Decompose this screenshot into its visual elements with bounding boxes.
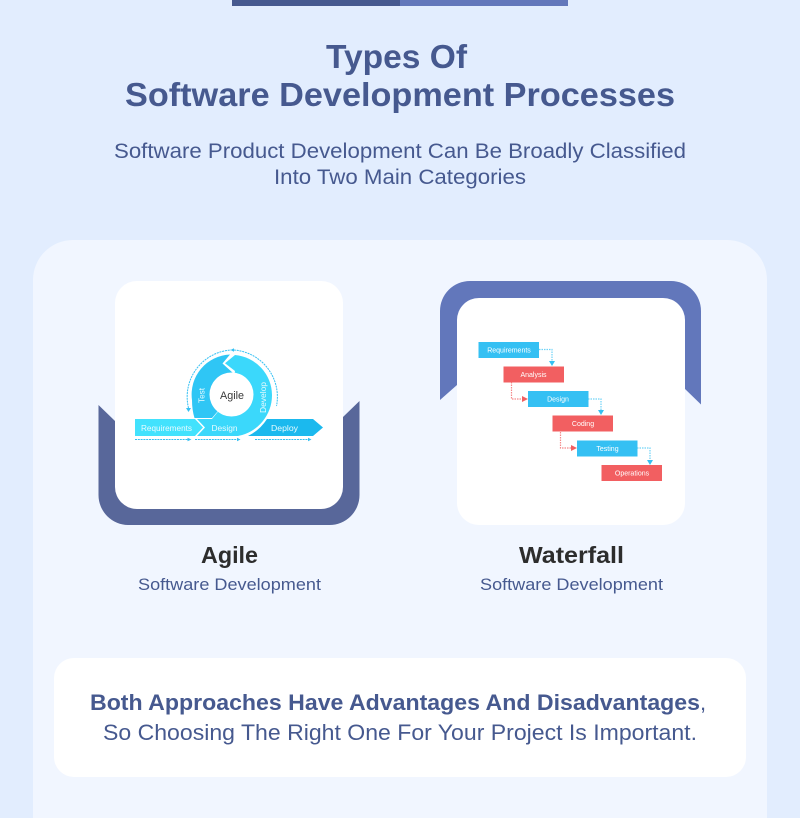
test label: Test — [196, 387, 206, 403]
callout — [54, 658, 746, 777]
callout text: So Choosing The Right One For Your Project Is Important. — [103, 720, 697, 745]
step: requirements — [478, 342, 539, 358]
callout text — [90, 690, 706, 745]
step: coding: Coding — [572, 421, 594, 428]
connector arrowheads — [522, 361, 653, 465]
title: Types Of — [326, 38, 468, 75]
callout text: Both Approaches Have Advantages And Disadvantages — [90, 690, 700, 715]
step: operations — [602, 465, 662, 481]
agile label: Agile — [220, 390, 244, 402]
agile centre circle — [210, 372, 254, 416]
waterfall white card — [457, 298, 685, 525]
deploy arrow — [248, 419, 323, 436]
requirements chevron — [135, 419, 203, 436]
develop label: Develop — [258, 382, 268, 413]
agile heading: Agile — [201, 542, 258, 568]
step: coding — [552, 416, 613, 432]
subtitle: Software Product Development Can Be Broadly Classified — [114, 140, 686, 163]
top accent bar — [232, 0, 568, 6]
develop and design band — [197, 355, 272, 436]
step: analysis: Analysis — [520, 372, 547, 379]
panel: agile — [98, 281, 360, 594]
step: design: Design — [547, 396, 569, 404]
waterfall heading: Waterfall — [519, 542, 624, 568]
dashed flow arrows — [135, 350, 308, 440]
design label: Design — [212, 423, 238, 433]
agile frame — [98, 401, 360, 525]
test arc — [192, 354, 233, 418]
panel: main content — [33, 240, 767, 818]
callout card — [54, 658, 746, 777]
waterfall diagram — [478, 342, 662, 481]
step: analysis — [504, 366, 564, 382]
requirements label: Requirements — [141, 423, 192, 433]
step: requirements: Requirements — [487, 348, 531, 354]
arrowheads — [186, 348, 312, 441]
agile subheading: Software Development — [138, 576, 321, 594]
title: Software Development Processes — [125, 76, 675, 113]
title — [125, 38, 675, 113]
agile diagram — [135, 348, 323, 441]
connectors — [512, 350, 650, 460]
waterfall frame — [440, 281, 701, 404]
panel: waterfall — [440, 281, 701, 594]
waterfall subheading: Software Development — [480, 576, 663, 594]
subtitle: Into Two Main Categories — [274, 166, 526, 189]
step: testing — [577, 440, 638, 456]
callout text: , — [700, 690, 706, 715]
step: operations: Operations — [615, 470, 650, 478]
agile white card — [115, 281, 343, 509]
deploy label: Deploy — [271, 423, 299, 433]
step: design — [528, 391, 588, 407]
subtitle — [114, 140, 686, 189]
step: testing: Testing — [596, 446, 619, 453]
